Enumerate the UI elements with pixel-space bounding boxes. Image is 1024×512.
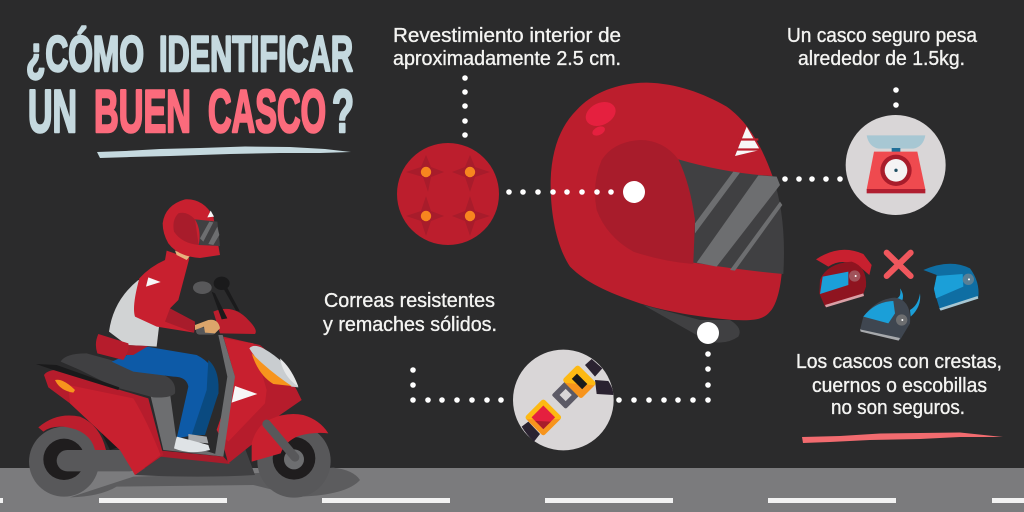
handlebar cover (213, 309, 256, 334)
upper buckle (562, 364, 597, 399)
title: CASCO (208, 78, 326, 145)
text: unsafe helmets (796, 351, 1002, 419)
drive chain (102, 427, 120, 450)
dotted connector: weight (782, 87, 899, 182)
dotted connector: lining to helmet (506, 181, 645, 203)
front wheel (257, 424, 331, 498)
text: straps: y remaches sólidos. (323, 314, 497, 336)
lower buckle (524, 398, 562, 436)
inner panel (595, 140, 695, 264)
jacket (134, 251, 195, 333)
rear light (55, 380, 75, 393)
shell (551, 83, 782, 320)
mirrors (193, 277, 240, 319)
X mark (887, 253, 911, 276)
title: UN (28, 78, 77, 145)
strap ends (522, 359, 613, 442)
headlight (249, 346, 298, 387)
text: unsafe helmets: Los cascos con crestas, (796, 351, 1002, 373)
seat (61, 353, 175, 397)
rear fender (38, 415, 106, 450)
title underline (97, 146, 351, 158)
dotted connector: lining top (462, 75, 468, 138)
helmet chevron (735, 127, 760, 156)
crest helmet (816, 250, 872, 307)
text: weight: Un casco seguro pesa (787, 25, 978, 47)
belt hem (122, 345, 148, 355)
under-seat frame (150, 393, 224, 457)
white chevron (232, 386, 257, 403)
title: BUEN (94, 78, 191, 145)
text: straps: Correas resistentes (324, 290, 495, 312)
steering column (215, 335, 235, 457)
bottom underline (802, 432, 1003, 443)
front fork (267, 424, 295, 457)
floor and underbody (135, 448, 255, 477)
road (0, 468, 1024, 512)
highlight (582, 97, 620, 137)
text: inner lining (393, 25, 621, 70)
unsafe helmets (816, 250, 979, 341)
text: weight (787, 25, 978, 70)
rear wheel (29, 427, 99, 497)
chin strap (643, 305, 740, 343)
scooter and rider (29, 199, 360, 498)
small helmet (163, 199, 220, 258)
jacket chevron (146, 277, 161, 287)
grab rail (36, 364, 119, 390)
text: unsafe helmets: no son seguros. (831, 397, 965, 419)
horned helmet (860, 288, 920, 341)
front shield (217, 337, 302, 463)
text: inner lining: aproximadamente 2.5 cm. (393, 48, 621, 70)
dotted connector: straps (410, 322, 719, 403)
front fender (252, 414, 328, 462)
neck (175, 251, 190, 260)
blue helmet (923, 264, 979, 311)
handlebar grip and hand (195, 320, 220, 335)
visor (678, 159, 784, 274)
text: inner lining: Revestimiento interior de (393, 25, 621, 47)
shirt (109, 280, 163, 347)
title: ¿CÓMO (26, 26, 144, 82)
legs (112, 347, 218, 438)
shadow (70, 468, 360, 497)
shoes (174, 434, 210, 452)
title: ? (332, 78, 354, 145)
lining pad circle (397, 143, 499, 245)
text: weight: alrededor de 1.5kg. (798, 48, 965, 70)
floor trim (160, 451, 230, 464)
text: unsafe helmets: cuernos o escobillas (812, 375, 987, 397)
waist bag (96, 334, 129, 360)
scale icon (846, 115, 946, 215)
middle tongue (552, 381, 580, 409)
exhaust (57, 450, 140, 471)
text: straps (323, 290, 497, 336)
title: IDENTIFICAR (159, 26, 353, 82)
buckle icon (513, 350, 614, 450)
title (26, 26, 354, 145)
main helmet (551, 83, 784, 343)
rear body (44, 370, 163, 475)
